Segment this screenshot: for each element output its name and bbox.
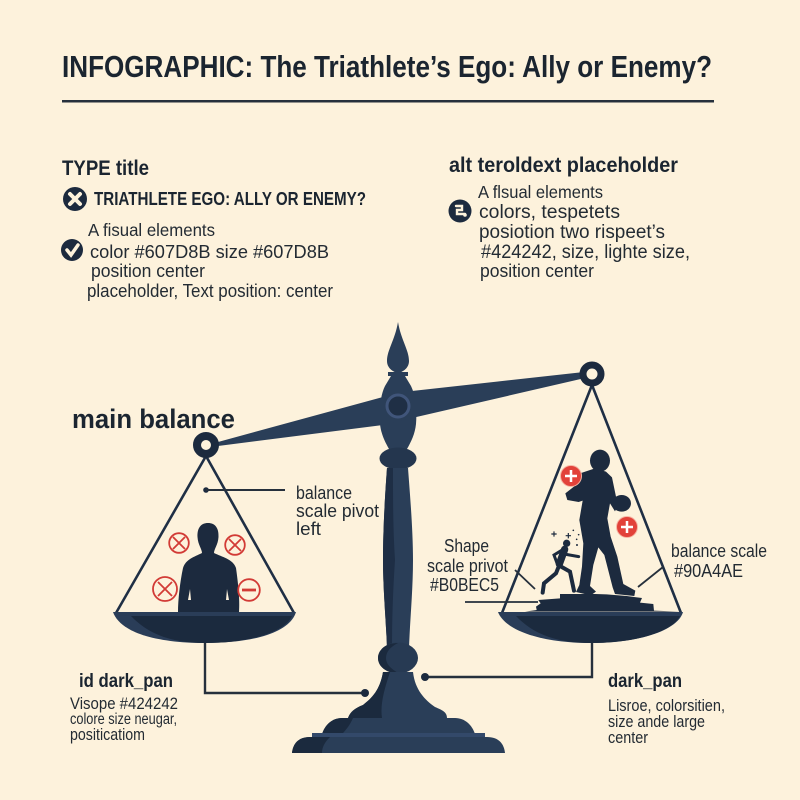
- body text: A fisual elements: [88, 220, 215, 240]
- body text: A flsual elements: [478, 182, 603, 202]
- icon: red minus: [238, 579, 260, 601]
- panel: left text block: [61, 157, 366, 301]
- athlete figures: [525, 450, 680, 612]
- label: id dark_pan: positicatiom: [70, 726, 145, 744]
- icon: red plus 1: [560, 466, 582, 486]
- label: balance scale right: [671, 541, 767, 581]
- label: dark_pan: Lisroe, colorsitien,: [608, 697, 725, 715]
- label: id dark_pan: Visope #424242: [70, 695, 178, 713]
- icon: check badge: [61, 239, 83, 261]
- column: [383, 468, 413, 648]
- body text: [478, 182, 690, 281]
- icon: red cross 1: [169, 533, 189, 553]
- icon: red plus 2: [616, 516, 638, 538]
- knob: [380, 448, 416, 470]
- pan bowl: [498, 612, 683, 643]
- label: shape scale pivot: scale privot: [427, 556, 508, 576]
- icon: link badge: [448, 200, 472, 222]
- label: dark_pan: size ande large: [608, 713, 705, 731]
- finial: [387, 322, 409, 373]
- panel: left pan: [113, 436, 296, 643]
- panel: right text block: [448, 154, 690, 281]
- panel: right pan: [465, 365, 683, 643]
- label: id dark_pan: [70, 671, 178, 744]
- label: balance scale pivot left: scale pivot: [296, 501, 379, 521]
- base tier upper: [322, 718, 475, 734]
- beam pivot: [387, 395, 409, 417]
- label: shape scale pivot: #B0BEC5: [430, 575, 499, 595]
- icon: red cross 3: [153, 577, 177, 601]
- body text: posiotion two rispeet’s: [479, 222, 665, 243]
- body text: color #607D8B size #607D8B: [90, 241, 329, 262]
- balance beam: [218, 372, 585, 446]
- base tier lower: [292, 737, 505, 753]
- ground rubble: [525, 594, 680, 612]
- sparkles: [551, 529, 579, 546]
- connector: left pan to base: [205, 640, 369, 697]
- callout line: [203, 487, 285, 493]
- body text: #424242, size, lighte size,: [481, 242, 690, 263]
- balance scale stand: [292, 322, 505, 753]
- label: balance scale pivot left: balance: [296, 483, 352, 503]
- label: id dark_pan: colore size neugar,: [70, 711, 177, 728]
- body text: placeholder, Text position: center: [87, 281, 333, 301]
- label: dark_pan: center: [608, 729, 648, 747]
- icon: red cross 2: [225, 535, 245, 555]
- right pivot ring: [583, 365, 601, 383]
- large athlete: [565, 450, 635, 596]
- left pivot ring: [197, 436, 215, 454]
- pan bowl: [113, 612, 296, 643]
- label: balance scale pivot left: [296, 483, 379, 539]
- heading: main balance: main balance: [72, 404, 235, 434]
- label: balance scale right: balance scale: [671, 541, 767, 561]
- heading: placeholder: alt teroldext placeholder: [449, 154, 678, 177]
- heading: type title: TYPE title: [62, 157, 149, 180]
- lower knob: [378, 642, 418, 674]
- pan strings: [116, 456, 294, 613]
- icon: cross badge: [63, 187, 87, 211]
- label: shape scale pivot: [427, 536, 508, 595]
- label: id dark_pan: id dark_pan: [79, 671, 173, 692]
- label: dark_pan: dark_pan: [608, 671, 682, 692]
- label: balance scale right: #90A4AE: [674, 561, 743, 581]
- label: dark_pan: [608, 671, 725, 747]
- person silhouette: [178, 523, 239, 612]
- callout lines: [465, 567, 663, 602]
- pan strings: [502, 385, 681, 613]
- body text: position center: [91, 261, 205, 281]
- base step: [312, 733, 485, 738]
- subheading: TRIATHLETE EGO: ALLY OR ENEMY?: [94, 189, 366, 209]
- connector: right pan to base: [421, 640, 592, 681]
- label: balance scale pivot left: left: [296, 519, 321, 539]
- body text: [87, 220, 333, 301]
- body text: colors, tespetets: [479, 202, 620, 223]
- flared foot: [348, 672, 447, 718]
- small runner: [543, 540, 579, 593]
- body text: position center: [480, 261, 594, 281]
- label: shape scale pivot: Shape: [444, 536, 489, 556]
